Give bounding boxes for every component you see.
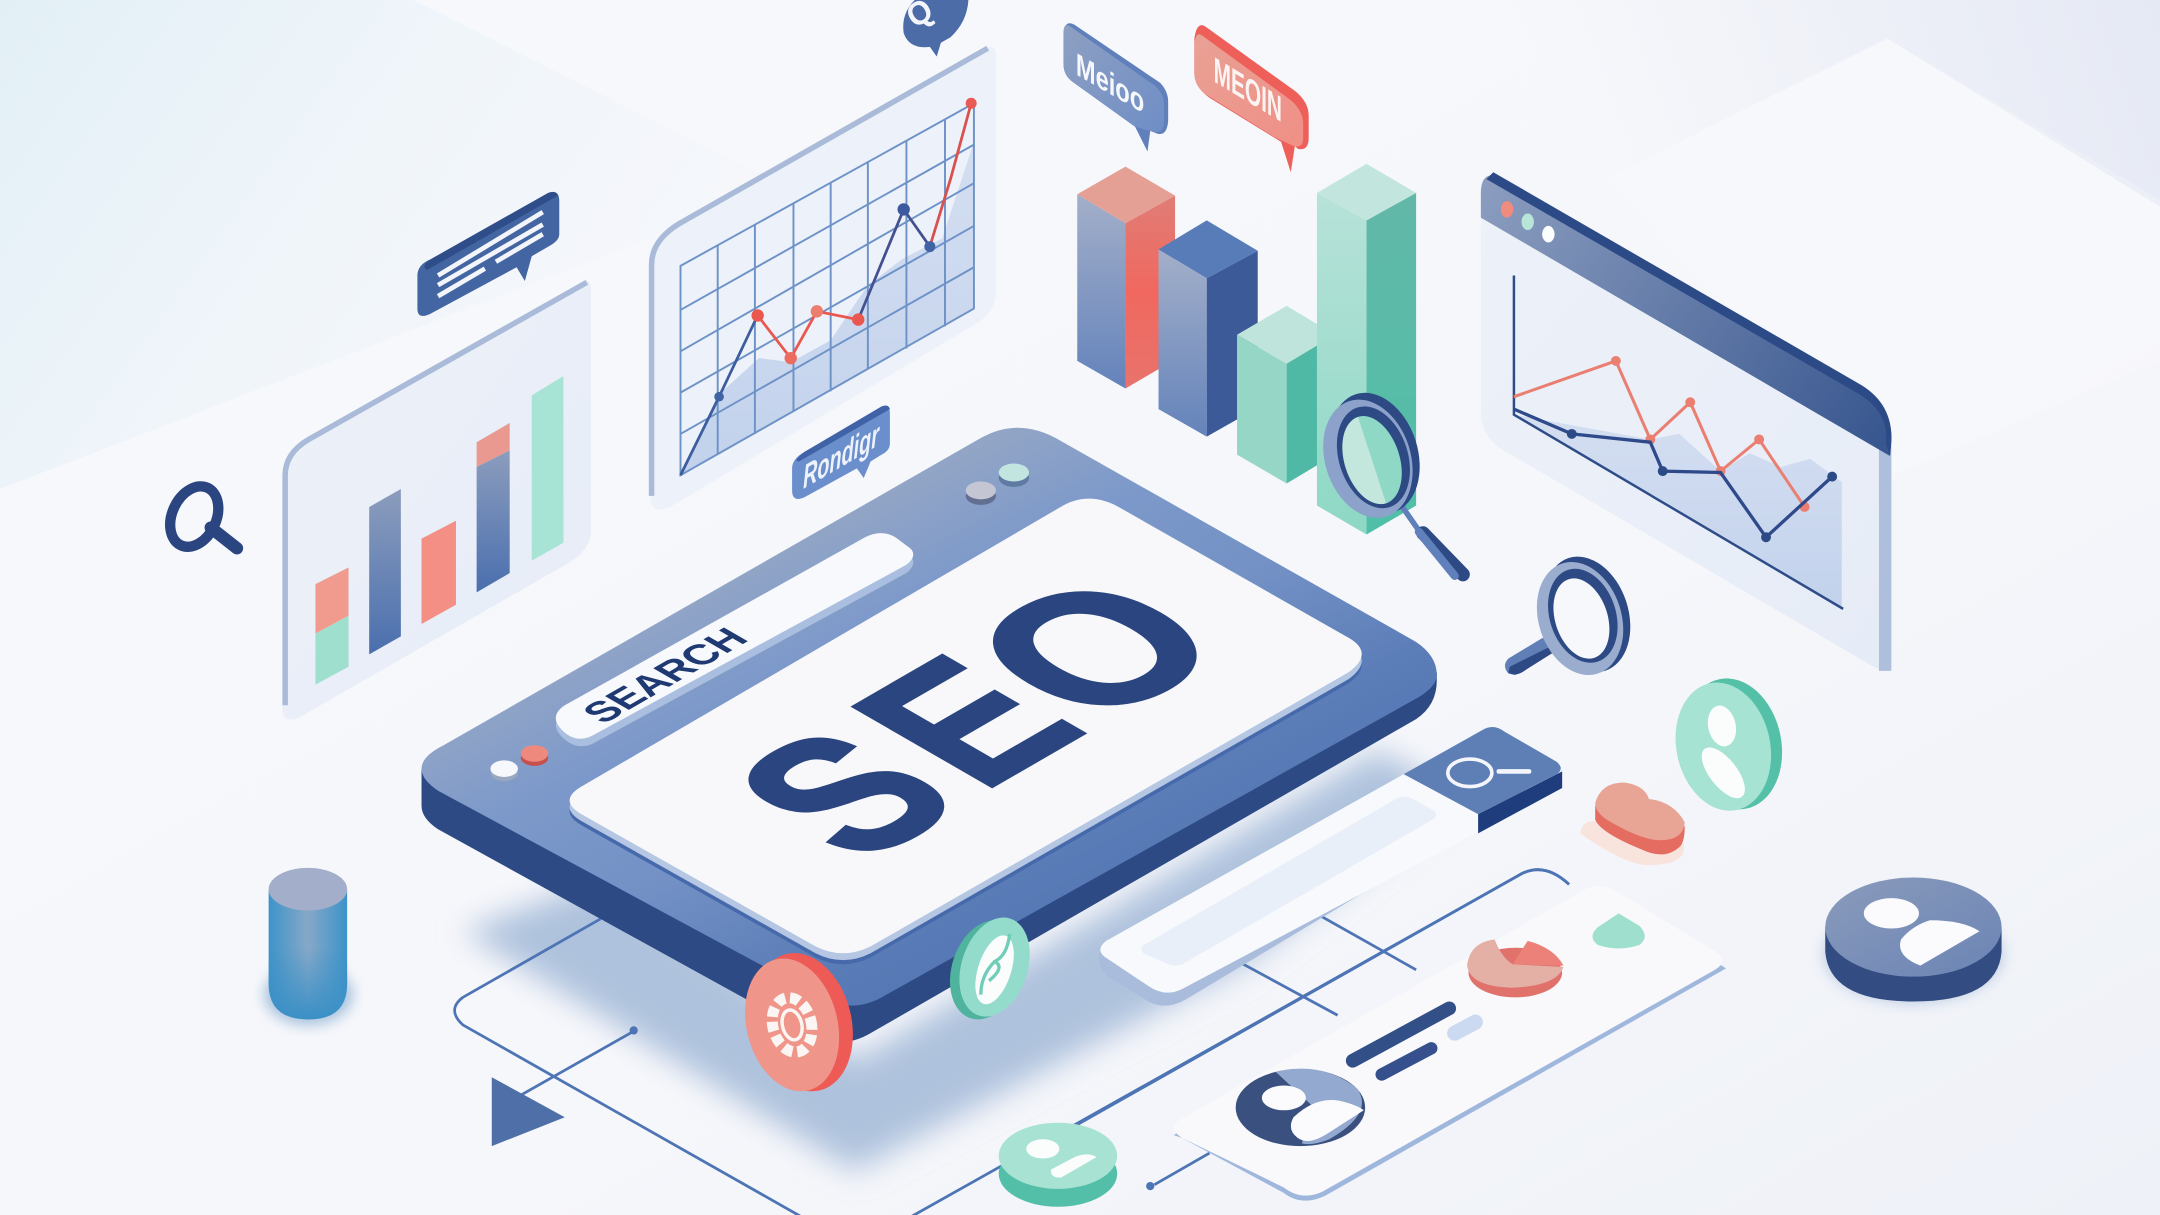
icon: magnifier left bbox=[161, 479, 237, 555]
callout: grey-blue label bubble bbox=[1063, 23, 1168, 152]
icon: navy user coin bbox=[1824, 878, 2003, 1003]
search bar bbox=[556, 533, 913, 746]
callout: blue label bubble bbox=[792, 405, 890, 499]
SEO heading: O bbox=[911, 545, 1281, 752]
text lines bbox=[1353, 1008, 1475, 1074]
chart area bbox=[1514, 415, 1842, 609]
panel: search widget bbox=[1099, 727, 1562, 1006]
icon: gear coin bbox=[732, 942, 867, 1102]
column mint tall bbox=[1317, 164, 1416, 534]
red series bbox=[1514, 356, 1810, 512]
SEO heading: S bbox=[678, 697, 1013, 891]
chart lines bbox=[681, 98, 977, 475]
pie chart bbox=[1467, 939, 1564, 997]
board top surface bbox=[422, 428, 1437, 1006]
search label: SEARCH bbox=[573, 622, 758, 729]
bar chart: 3D columns bbox=[1077, 164, 1416, 534]
icon: leaf coin bbox=[938, 908, 1042, 1029]
chart axes bbox=[1514, 276, 1843, 609]
window buttons left bbox=[490, 745, 548, 781]
icon: chat bubble with lines bbox=[417, 192, 559, 316]
SEO heading bbox=[678, 545, 1281, 891]
search widget button bbox=[1404, 727, 1562, 833]
icon: magnifier over columns bbox=[1309, 381, 1463, 576]
chart grid bbox=[681, 103, 974, 475]
icon: top search bubble bbox=[900, 0, 968, 56]
icon: heart shape bbox=[1580, 782, 1685, 865]
callout: blue label bubble: Rondigr bbox=[803, 414, 880, 496]
board shadow bbox=[463, 751, 1460, 1171]
column mint short bbox=[1237, 306, 1335, 484]
connector lines bbox=[455, 870, 1569, 1215]
callout: red label bubble: MEOIN bbox=[1214, 50, 1282, 131]
mint drop bbox=[1592, 913, 1645, 948]
chart area fill bbox=[681, 142, 974, 475]
content panel bbox=[570, 499, 1362, 964]
column navy bbox=[1159, 220, 1258, 437]
callout: red label bubble bbox=[1194, 25, 1309, 172]
panel: bar chart card bbox=[282, 281, 591, 720]
icon: cylinder bbox=[264, 868, 353, 1025]
panel: main SEO board bbox=[422, 428, 1437, 1042]
panel: browser window line chart bbox=[1481, 172, 1891, 671]
icon: play triangle bbox=[492, 1077, 565, 1146]
window buttons right bbox=[966, 464, 1029, 505]
callout: grey-blue label bubble: Meioo bbox=[1076, 46, 1144, 121]
panel: line chart with grid bbox=[650, 47, 996, 509]
icon: mint user coin bbox=[1664, 669, 1794, 820]
icon: mint user coin bottom bbox=[999, 1123, 1117, 1207]
window header bar bbox=[1481, 172, 1891, 456]
board base bbox=[422, 551, 1437, 1042]
long connector over card bbox=[1076, 870, 1569, 1125]
column red bbox=[1077, 167, 1175, 388]
panel: profile card bbox=[1076, 870, 1726, 1201]
navy series bbox=[1514, 409, 1837, 542]
bar chart bars bbox=[315, 376, 563, 685]
icon: magnifier right bbox=[1505, 545, 1645, 686]
SEO heading: E bbox=[799, 625, 1135, 818]
user avatar bbox=[1236, 1069, 1365, 1146]
